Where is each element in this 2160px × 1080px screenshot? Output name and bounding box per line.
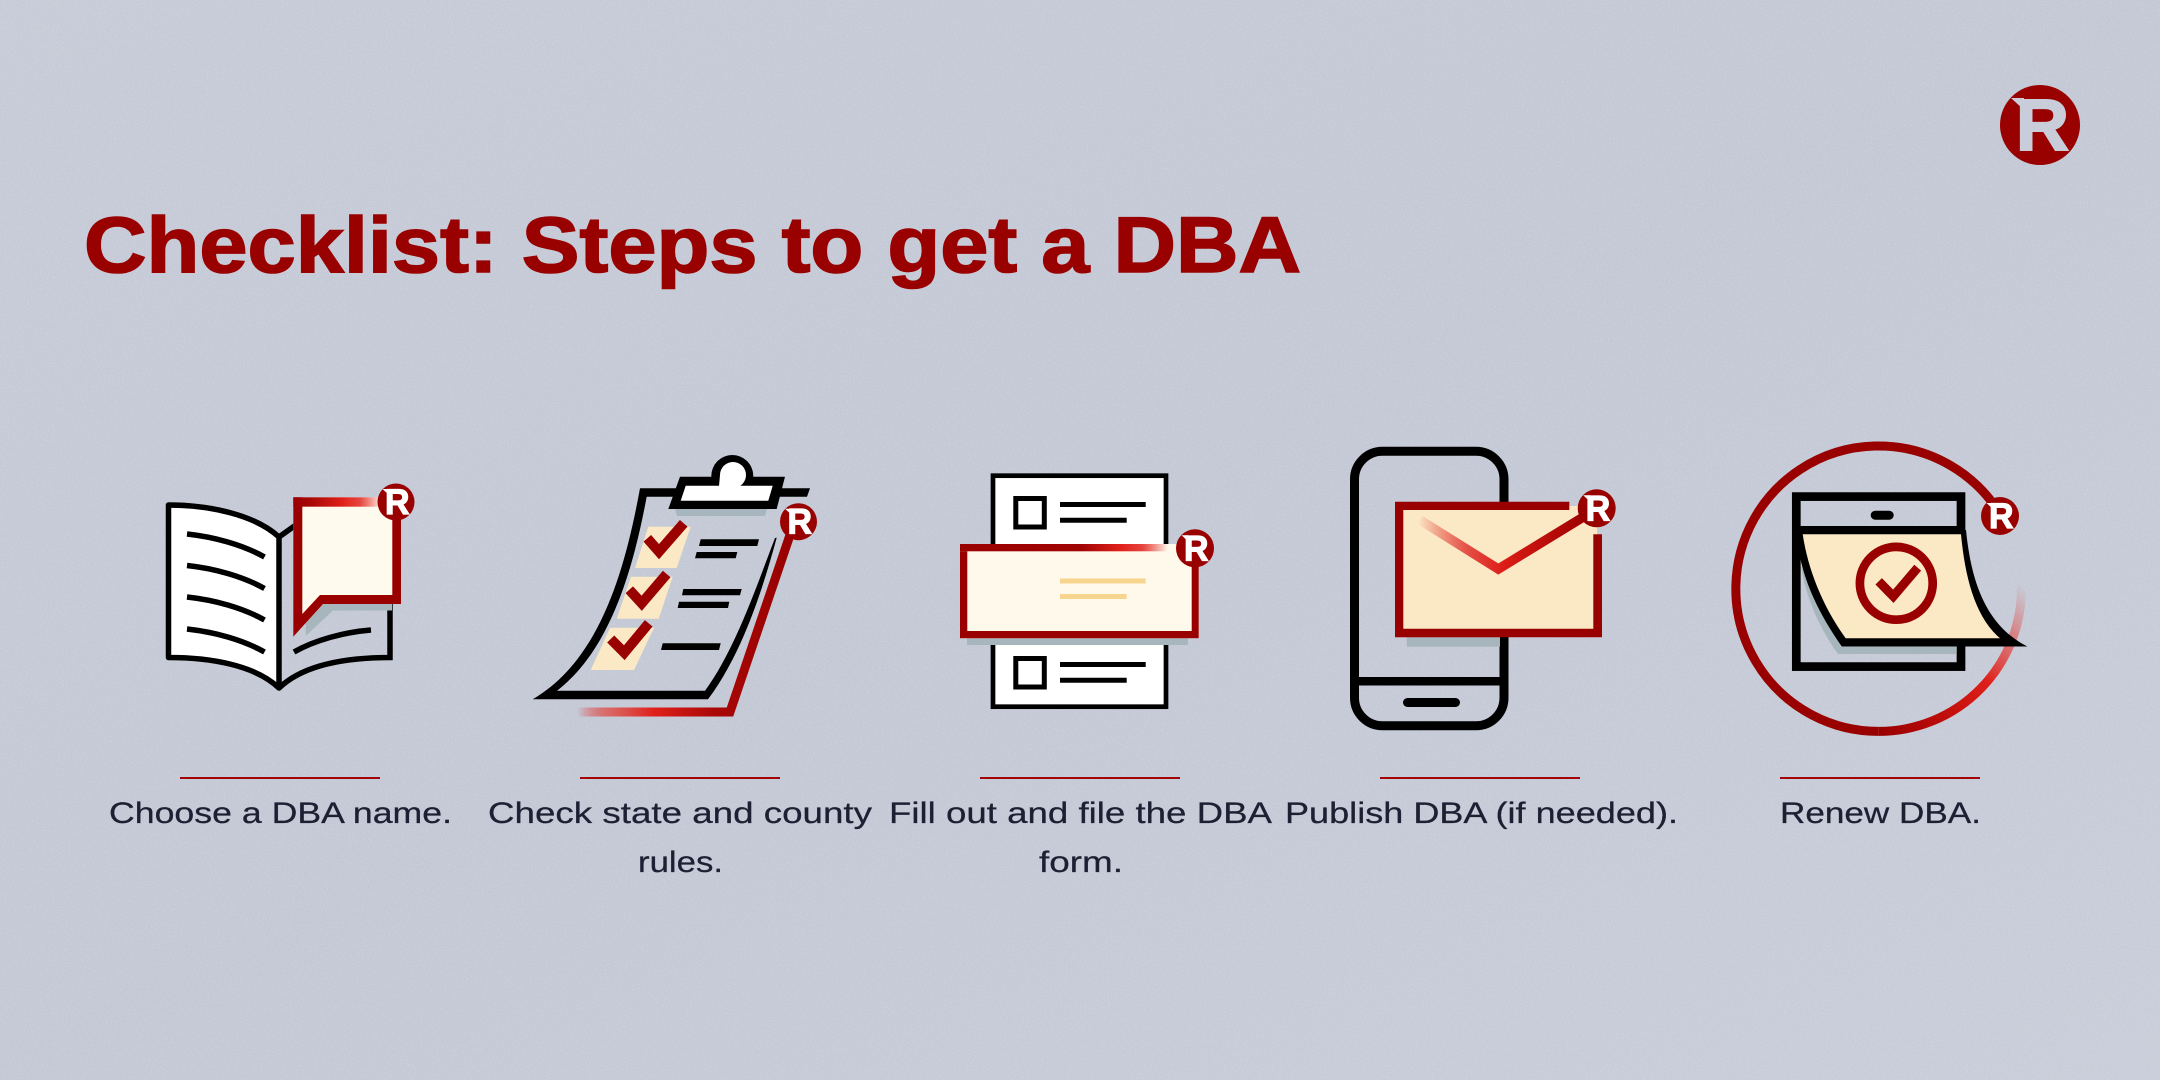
icon: R badge: R bbox=[1184, 529, 1208, 568]
calendar back bbox=[1796, 497, 1961, 667]
form checkbox top bbox=[1016, 498, 1044, 527]
caption: Choose a DBA name. bbox=[109, 797, 452, 830]
rule bbox=[1380, 777, 1580, 779]
caption: Renew DBA. bbox=[1780, 797, 1981, 830]
speech bubble bbox=[293, 497, 401, 637]
icon: phone with envelope bbox=[1354, 451, 1616, 726]
caption: rules. bbox=[638, 846, 723, 879]
caption bbox=[889, 797, 1272, 879]
form sheet bbox=[993, 476, 1166, 707]
panel: step 3 file the form bbox=[889, 476, 1272, 879]
caption: Publish DBA (if needed). bbox=[1285, 797, 1678, 830]
icon: R badge: R bbox=[385, 483, 410, 522]
form checkbox bottom bbox=[1016, 658, 1044, 687]
check mark bbox=[1879, 568, 1918, 596]
icon: clipboard checklist bbox=[533, 455, 817, 712]
envelope shadow bbox=[1407, 637, 1500, 647]
icon: R badge: R bbox=[788, 503, 812, 542]
icon: R badge bbox=[780, 503, 817, 542]
list lines bbox=[661, 539, 759, 650]
icon: R badge: R bbox=[1586, 489, 1610, 528]
envelope bbox=[1395, 502, 1602, 637]
checkboxes bbox=[591, 527, 691, 670]
panel: step 4 publish bbox=[1285, 451, 1678, 830]
clipboard board bbox=[533, 488, 810, 699]
icon: open book with speech bubble bbox=[168, 483, 414, 688]
icon: R badge: R bbox=[1989, 497, 2014, 536]
panel: step 5 renew bbox=[1736, 446, 2027, 830]
icon: brand logo bbox=[2000, 85, 2080, 166]
rule bbox=[580, 777, 780, 779]
panel: step 2 check rules bbox=[488, 455, 872, 879]
caption bbox=[488, 797, 872, 879]
icon: brand logo: R bbox=[2016, 86, 2069, 166]
check marks bbox=[611, 523, 684, 653]
form lines bottom bbox=[1060, 662, 1146, 683]
curling page bbox=[1792, 530, 2027, 646]
caption: form. bbox=[1039, 846, 1123, 879]
panel: step 1 choose a name bbox=[109, 483, 452, 830]
red offset edge bbox=[577, 535, 790, 712]
highlighted row bbox=[960, 544, 1199, 638]
renewal ring bbox=[1736, 446, 2021, 731]
calendar band bbox=[1792, 526, 1965, 534]
phone bbox=[1354, 451, 1504, 726]
bubble shadow bbox=[306, 604, 392, 636]
caption: Fill out and file the DBA bbox=[889, 797, 1272, 830]
form lines top bbox=[1060, 502, 1146, 523]
check circle bbox=[1860, 547, 1933, 620]
title: Checklist: Steps to get a DBA bbox=[84, 200, 1301, 289]
page text lines bbox=[187, 534, 371, 652]
left page bbox=[168, 505, 279, 688]
clip shadow bbox=[675, 509, 767, 516]
icon: calendar in renewal ring bbox=[1736, 446, 2027, 731]
right page bbox=[279, 522, 390, 688]
icon: form with highlighted row bbox=[960, 476, 1214, 707]
calendar pill bbox=[1871, 511, 1894, 520]
calendar shadow bbox=[1801, 565, 1957, 654]
icon: R badge bbox=[1981, 497, 2019, 536]
icon: R badge bbox=[1578, 489, 1616, 528]
icon: R badge bbox=[378, 483, 414, 522]
clip bbox=[668, 455, 785, 509]
icon: R badge bbox=[1176, 529, 1214, 568]
rule bbox=[180, 777, 380, 779]
rule bbox=[1780, 777, 1980, 779]
rule bbox=[980, 777, 1180, 779]
caption: Check state and county bbox=[488, 797, 872, 830]
row shadow bbox=[967, 638, 1188, 645]
